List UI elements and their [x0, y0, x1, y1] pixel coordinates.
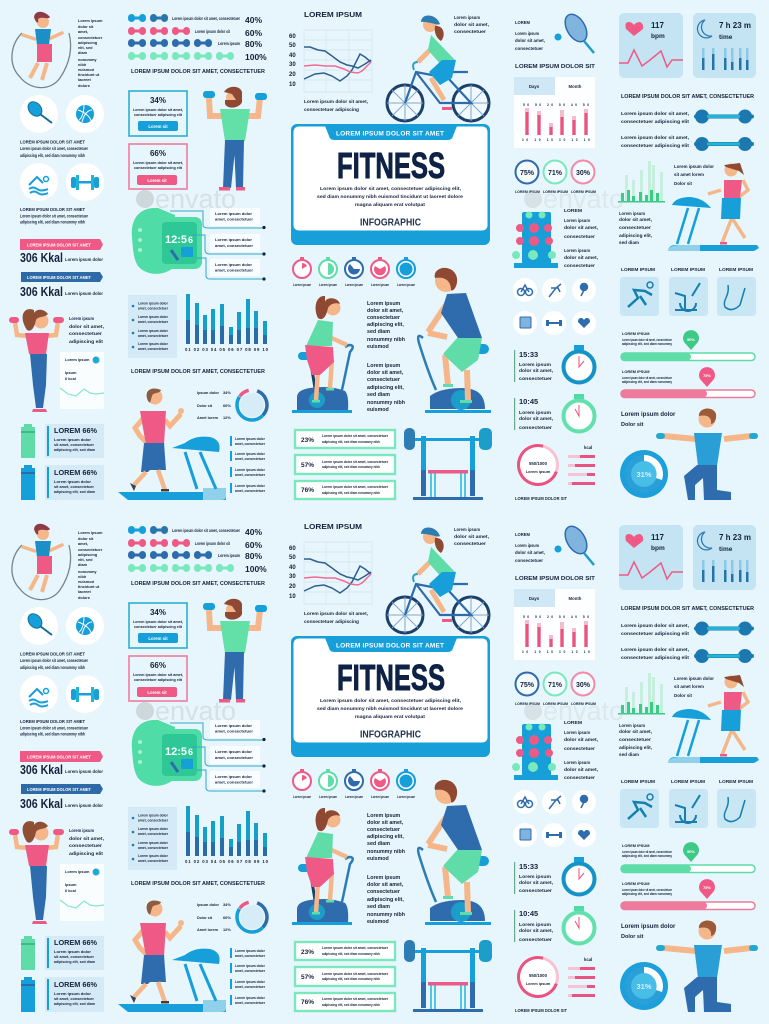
sleep time card	[693, 13, 756, 78]
pink stat box	[129, 144, 187, 189]
three green percentage boxes	[295, 430, 395, 499]
green water bottle card: LOREM 66%	[54, 428, 98, 435]
icon: smartwatch with callouts: amet, consectetuer	[215, 243, 254, 248]
stopwatch time 15:33: consectetuer	[519, 376, 552, 381]
text: block two	[20, 207, 88, 224]
text: lunge caption: Lorem ipsum dolor	[621, 412, 676, 418]
dumbbell percentage rows: 100%	[245, 52, 267, 62]
three progress rings: 75%	[520, 170, 535, 177]
three green percentage boxes: 76%	[301, 487, 314, 494]
pink progress bar: 75%	[703, 373, 711, 378]
heart rate card	[619, 13, 683, 78]
pink calorie banner: 306 Kkal	[20, 251, 63, 265]
green progress bar: adipiscing elit, sed diam nonummy	[622, 342, 672, 346]
text: bike captions: sed diam	[367, 329, 390, 335]
ring chart with legend	[197, 384, 273, 426]
text: bike captions: sed diam	[367, 392, 390, 398]
title panel: LOREM IPSUM DOLOR SIT AMET	[336, 130, 444, 138]
pink stat box: Lorem sit	[147, 178, 167, 183]
stopwatch time 10:45: consectetuer	[519, 425, 552, 430]
row of stopwatches: Lorem ipsum	[319, 283, 337, 287]
text and mini chart card: consectetuer	[69, 331, 102, 336]
row of stopwatches: Lorem ipsum	[397, 283, 415, 287]
icon: smartwatch with callouts: amet, consectetuer	[215, 268, 254, 272]
dumbbell rack with text: consectetuer	[564, 234, 595, 239]
text and mini chart card	[60, 316, 104, 409]
treadmill side text list: amet, consectetuer	[235, 473, 266, 477]
text: rope caption: laoreet	[78, 77, 91, 82]
calorie ring and bars: 550/1000	[529, 461, 548, 466]
three activity icon cards	[620, 267, 756, 316]
days and month bar chart	[514, 77, 595, 148]
green progress bar	[621, 330, 755, 360]
sleep time card: 7 h 23 m	[719, 21, 751, 30]
text: bike captions: adipiscing elit,	[367, 322, 404, 328]
calorie ring and bars	[513, 440, 595, 501]
figure: man walking on treadmill	[118, 388, 226, 500]
tennis racket with text: LOREM IPSUM DOLOR SIT	[515, 64, 596, 70]
teal stat box: consectetuer adipiscing elit	[134, 112, 183, 117]
blue calorie banner	[20, 272, 103, 299]
text: bike captions: consectetuer	[367, 377, 400, 383]
line chart: consectetuer adipiscing	[304, 107, 359, 112]
icons: swimmer and dumbbell	[20, 163, 104, 201]
line chart: 10	[289, 82, 296, 88]
title panel: sed diam nonummy nibh euismod tincidunt ut laoreet dolore	[317, 194, 464, 199]
text: bike captions: consectetuer	[367, 315, 400, 321]
text: rope caption: elit, sed	[78, 45, 93, 50]
icons: racket and volleyball	[20, 95, 104, 133]
tennis racket with text: Lorem ipsum	[515, 31, 539, 36]
green water bottle card	[21, 424, 104, 458]
text and mini chart card: adipiscing elit	[69, 339, 104, 344]
three green percentage boxes: Lorem ipsum dolor sit amet, consectetuer	[322, 484, 388, 489]
title panel: INFOGRAPHIC	[360, 218, 421, 228]
three green percentage boxes: 23%	[301, 437, 314, 444]
text: rope caption: adipiscing	[78, 40, 98, 45]
text: cyclist caption	[454, 15, 489, 34]
dumbbell rack with text: dolor sit amet,	[564, 225, 598, 230]
figure: bearded man with dumbbells	[203, 87, 267, 190]
text and mini chart card: dolor sit amet,	[69, 324, 104, 329]
text and mini chart card: 6 kcal	[65, 376, 76, 381]
stopwatch time 15:33	[514, 345, 594, 382]
days and month bar chart: Month	[569, 84, 582, 89]
ring chart with legend: 12%	[223, 415, 231, 420]
line chart: Lorem ipsum dolor sit amet,	[304, 99, 368, 104]
text: block two: adipiscing elit, sed diam nonummy nibh	[20, 220, 85, 224]
three progress rings: LOREM IPSUM	[515, 190, 540, 194]
title panel: Lorem ipsum dolor sit amet, consectetuer adipiscing elit,	[320, 186, 461, 191]
text: bike captions: dolor sit amet,	[367, 370, 404, 376]
pink stat box: 66%	[150, 149, 166, 158]
three green percentage boxes: adipiscing elit, sed diam nonummy nibh	[322, 439, 380, 444]
title panel	[291, 124, 490, 245]
text: lunge caption	[621, 412, 676, 428]
figure: woman on bicycle	[387, 15, 489, 121]
pink progress bar: adipiscing elit, sed diam nonummy	[622, 380, 672, 384]
treadmill side text list: Lorem ipsum dolor	[235, 452, 266, 456]
stopwatch time 10:45: 10:45	[519, 397, 538, 406]
sleep time card: time	[719, 34, 733, 41]
green progress bar: 50%	[687, 337, 695, 342]
ring chart with legend: Ipsum dolor	[197, 390, 219, 395]
calorie ring and bars: kcal	[584, 445, 592, 450]
dumbbell percentage rows: Lorem ipsum	[218, 41, 240, 46]
green progress bar: Lorem ipsum dolor sit amet, consectetuer	[622, 338, 673, 342]
three activity icon cards: LOREM IPSUM	[671, 267, 705, 272]
line chart: LOREM IPSUM	[304, 12, 362, 19]
pink progress bar: Lorem ipsum dolor sit amet, consectetuer	[622, 376, 673, 380]
pie chart 31 percent: 31%	[636, 470, 652, 479]
three green percentage boxes: adipiscing elit, sed diam nonummy nibh	[322, 464, 380, 469]
ring chart with legend: Amet lorem	[197, 415, 219, 420]
three green percentage boxes: Lorem ipsum dolor sit amet, consectetuer	[322, 433, 388, 438]
barbell text list: Lorem ipsum dolor sit amet,	[621, 135, 689, 140]
icon: barbell bench rack	[404, 428, 492, 500]
dumbbell rack with text: Lorem ipsum	[564, 248, 590, 253]
dumbbell percentage rows: 80%	[245, 39, 262, 49]
teal stat box: Lorem sit	[148, 124, 168, 129]
dumbbell percentage rows: Lorem ipsum dolor sit amet, consectetuer	[172, 16, 240, 21]
pink calorie banner	[20, 239, 103, 265]
bar chart panel: 01 02 03 04 05 06 07 08 09 10	[185, 347, 269, 352]
calorie ring and bars: LOREM IPSUM DOLOR SIT	[515, 496, 567, 501]
text: cyclist caption: Lorem ipsum	[454, 15, 480, 20]
text: rope caption: consectetuer	[78, 35, 103, 40]
text: rope caption: nibh	[78, 62, 87, 67]
text: rope caption: euismod	[78, 67, 95, 72]
text: rope caption: tincidunt ut	[78, 72, 100, 77]
icon: smartwatch with callouts: 12:5	[165, 234, 187, 246]
blue calorie banner: LOREM IPSUM DOLOR SIT AMET	[27, 275, 91, 280]
line chart: 50	[289, 43, 296, 49]
stopwatch time 10:45: Lorem ipsum	[519, 410, 551, 415]
three progress rings: LOREM IPSUM	[571, 190, 596, 194]
text: rope caption: diam	[78, 50, 88, 55]
text: runner caption	[674, 164, 714, 186]
bar chart panel: LOREM IPSUM DOLOR SIT AMET, CONSECTETUER	[131, 369, 265, 375]
green water bottle card: adipiscing elit, sed diam	[54, 447, 95, 452]
line chart	[289, 12, 372, 112]
ring chart with legend: 66%	[223, 403, 231, 408]
text: bike captions: Lorem ipsum	[367, 301, 401, 307]
dumbbell percentage rows: 60%	[245, 28, 262, 38]
tennis racket with text	[515, 11, 596, 70]
row of stopwatches	[293, 257, 415, 287]
blue water bottle card: LOREM 66%	[54, 470, 98, 477]
bar chart panel: Lorem ipsum dolor	[138, 315, 169, 319]
three green percentage boxes: adipiscing elit, sed diam nonummy nibh	[322, 490, 380, 495]
icon: smartwatch with callouts: 6	[188, 235, 193, 245]
text: block one: adipiscing elit, sed diam nonummy nibh	[20, 153, 85, 158]
pie chart 31 percent	[620, 450, 668, 498]
days and month bar chart: 50 50 20 50 40 50	[523, 103, 589, 107]
figure: man in lunge with dumbbells	[656, 408, 758, 500]
line chart: 30	[289, 62, 296, 68]
treadmill side text list: amet, consectetuer	[235, 442, 266, 446]
dumbbell rack with text: Lorem ipsum	[564, 218, 590, 223]
line chart: 60	[289, 34, 296, 40]
text: block two: LOREM IPSUM DOLOR SIT AMET	[20, 207, 85, 212]
text: bike captions: Lorem ipsum	[367, 363, 401, 369]
text: runner caption: Lorem ipsum dolor	[674, 164, 714, 169]
treadmill side text list: amet, consectetuer	[235, 489, 266, 493]
line chart: 20	[289, 72, 296, 78]
figure: woman on treadmill	[668, 163, 759, 251]
text: block one	[20, 140, 88, 158]
dumbbell percentage rows	[128, 14, 267, 75]
tennis racket with text: dolor sit amet,	[515, 38, 545, 43]
text and mini chart card: Ipsum	[65, 370, 77, 375]
stopwatch time 10:45	[514, 394, 594, 432]
pink stat box: consectetuer adipiscing elit	[134, 165, 183, 170]
three green percentage boxes: 57%	[301, 462, 314, 469]
bar chart panel: Lorem ipsum dolor	[138, 329, 169, 333]
stopwatch time 15:33: dolor sit amet,	[519, 368, 553, 373]
text: cyclist caption: consectetuer	[454, 29, 486, 34]
pink progress bar: LOREM IPSUM	[622, 369, 649, 374]
blue water bottle card	[21, 465, 104, 500]
watermark: envato left: envato	[155, 184, 236, 214]
teal stat box: Lorem ipsum dolor sit amet,	[133, 107, 183, 112]
figure: woman lifting dumbbells	[9, 309, 64, 412]
blue water bottle card: sit amet, consectetuer	[54, 484, 94, 489]
text and mini chart card: Lorem ipsum	[65, 357, 90, 362]
heart rate card: bpm	[651, 33, 665, 40]
blue calorie banner: Lorem ipsum dolor	[65, 291, 103, 296]
treadmill side text list: Lorem ipsum dolor	[235, 484, 266, 488]
text: bike captions: nonummy nibh	[367, 337, 405, 343]
green activity chart	[618, 161, 665, 245]
barbell text list: Lorem ipsum dolor sit amet,	[621, 111, 689, 116]
text: rope caption: amet,	[78, 29, 88, 34]
bar chart panel: Lorem ipsum dolor	[138, 342, 169, 346]
treadmill side text list	[230, 436, 266, 493]
stopwatch time 15:33: Lorem ipsum	[519, 362, 551, 367]
text: rope caption: dolore	[78, 83, 91, 88]
text: bike captions: adipiscing elit,	[367, 385, 404, 391]
three progress rings: 71%	[548, 170, 563, 177]
text: rope caption	[78, 18, 103, 88]
bar chart panel: Lorem ipsum dolor	[138, 302, 169, 306]
tennis racket with text: LOREM	[515, 20, 530, 25]
text: rope caption: dolor sit	[78, 24, 94, 29]
dumbbell rack with text	[512, 208, 598, 268]
bar chart panel: amet, consectetuer	[138, 320, 169, 324]
treadmill side text list: Lorem ipsum dolor	[235, 468, 266, 472]
row of stopwatches: Lorem ipsum	[371, 283, 389, 287]
lower sheet: repeat of upper sheet	[9, 523, 759, 1013]
text: runner caption: sit amet lorem	[674, 172, 704, 177]
tennis racket with text: consectetuer	[515, 46, 543, 51]
text: bike captions: nonummy nibh	[367, 400, 405, 406]
days and month bar chart: 10 10 10 10 10 10	[522, 138, 590, 142]
bar chart panel: amet, consectetuer	[138, 334, 169, 338]
dumbbell percentage rows: 40%	[245, 15, 262, 25]
dumbbell rack with text: consectetuer	[564, 263, 595, 268]
bar chart panel	[128, 294, 269, 375]
green activity chart: sed diam	[619, 240, 639, 245]
figure: man on exercise bike	[418, 268, 491, 413]
treadmill side text list: amet, consectetuer	[235, 457, 266, 461]
green activity chart: consectetuer	[619, 225, 651, 230]
row of stopwatches: Lorem ipsum	[345, 283, 363, 287]
treadmill side text list: Lorem ipsum dolor	[235, 437, 266, 441]
pink calorie banner: LOREM IPSUM DOLOR SIT AMET	[27, 242, 91, 248]
text: rope caption: nonummy	[78, 57, 97, 62]
ring chart with legend: Dolor sit	[197, 403, 213, 408]
text and mini chart card: Lorem ipsum	[69, 316, 94, 321]
barbell text list	[621, 94, 754, 151]
text: block one: Lorem ipsum dolor sit amet, consectetuer	[20, 146, 88, 151]
barbell text list: LOREM IPSUM DOLOR SIT AMET, CONSECTETUER	[621, 94, 754, 100]
upper sheet	[9, 11, 759, 501]
days and month bar chart: Days	[529, 84, 540, 89]
heading: fitness: FITNESS	[337, 145, 445, 186]
stopwatch time 15:33: 15:33	[519, 350, 538, 359]
green progress bar: LOREM IPSUM	[622, 331, 649, 336]
icon: girl skipping rope	[12, 12, 71, 88]
green water bottle card: sit amet, consectetuer	[54, 442, 94, 447]
bar chart panel: amet, consectetuer	[138, 306, 169, 310]
three green percentage boxes: Lorem ipsum dolor sit amet, consectetuer	[322, 459, 388, 464]
teal stat box	[129, 91, 187, 136]
dumbbell rack with text: LOREM	[564, 208, 582, 213]
icon: smartwatch with callouts: Lorem ipsum dolor	[215, 237, 253, 242]
dumbbell percentage rows: LOREM IPSUM DOLOR SIT AMET, CONSECTETUER	[131, 69, 265, 75]
text: block two: Lorem ipsum dolor sit amet, consectetuer	[20, 214, 88, 218]
icon: smartwatch with callouts: Lorem ipsum dolor	[215, 262, 253, 267]
icon: smartwatch with callouts: amet, consectetuer	[215, 216, 254, 222]
text: bike captions: dolor sit amet,	[367, 308, 404, 314]
text: runner caption: Dolor sit	[674, 181, 693, 186]
calorie ring and bars: Lorem ipsum	[526, 469, 551, 474]
pink stat box: Lorem ipsum dolor sit amet,	[133, 160, 183, 165]
barbell text list: consectetuer adipiscing elit	[621, 143, 690, 148]
ring chart with legend: 34%	[223, 390, 231, 395]
pink progress bar	[621, 367, 755, 398]
bar chart panel: amet, consectetuer	[138, 347, 169, 351]
blue water bottle card: Lorem ipsum dolor	[54, 479, 92, 484]
dumbbell rack with text: dolor sit amet,	[564, 255, 598, 260]
three activity icon cards: LOREM IPSUM	[621, 267, 655, 272]
blue water bottle card: adipiscing elit, sed diam	[54, 489, 95, 494]
six small circular icons	[513, 278, 596, 335]
text: lunge caption: Dolor sit	[621, 422, 643, 428]
teal stat box: 34%	[150, 96, 166, 105]
green activity chart: dolor sit amet,	[619, 217, 652, 222]
three activity icon cards: LOREM IPSUM	[719, 267, 753, 272]
row of stopwatches: Lorem ipsum	[293, 283, 311, 287]
text: cyclist caption: dolor sit amet,	[454, 22, 489, 27]
line chart: 40	[289, 53, 296, 59]
text: block one: LOREM IPSUM DOLOR SIT AMET	[20, 140, 85, 144]
heart rate card: 117	[651, 21, 664, 30]
barbell text list: consectetuer adipiscing elit	[621, 119, 690, 124]
text: bike captions: euismod	[367, 407, 389, 413]
dumbbell percentage rows: Lorem ipsum dolor sit	[195, 29, 230, 34]
green water bottle card: Lorem ipsum dolor	[54, 437, 92, 442]
title panel: magna aliquam erat volutpat	[355, 202, 426, 207]
icon: smartwatch with callouts: Lorem ipsum dolor	[215, 211, 253, 216]
text: bike captions	[367, 301, 405, 413]
watermark: envato right: envato	[543, 184, 624, 214]
green activity chart: Lorem ipsum	[619, 211, 645, 216]
three progress rings	[515, 160, 596, 194]
green activity chart: adipiscing elit,	[619, 233, 652, 238]
three progress rings: 30%	[576, 170, 591, 177]
pink calorie banner: Lorem ipsum dolor	[65, 257, 103, 262]
icon: smartwatch with callouts	[132, 208, 266, 281]
figure: woman on exercise bike	[292, 296, 353, 413]
blue calorie banner: 306 Kkal	[20, 285, 63, 299]
text: rope caption: Lorem ipsum	[78, 18, 103, 23]
three progress rings: LOREM IPSUM	[543, 190, 568, 194]
text: bike captions: euismod	[367, 344, 389, 350]
stopwatch time 10:45: dolor sit amet,	[519, 416, 553, 421]
